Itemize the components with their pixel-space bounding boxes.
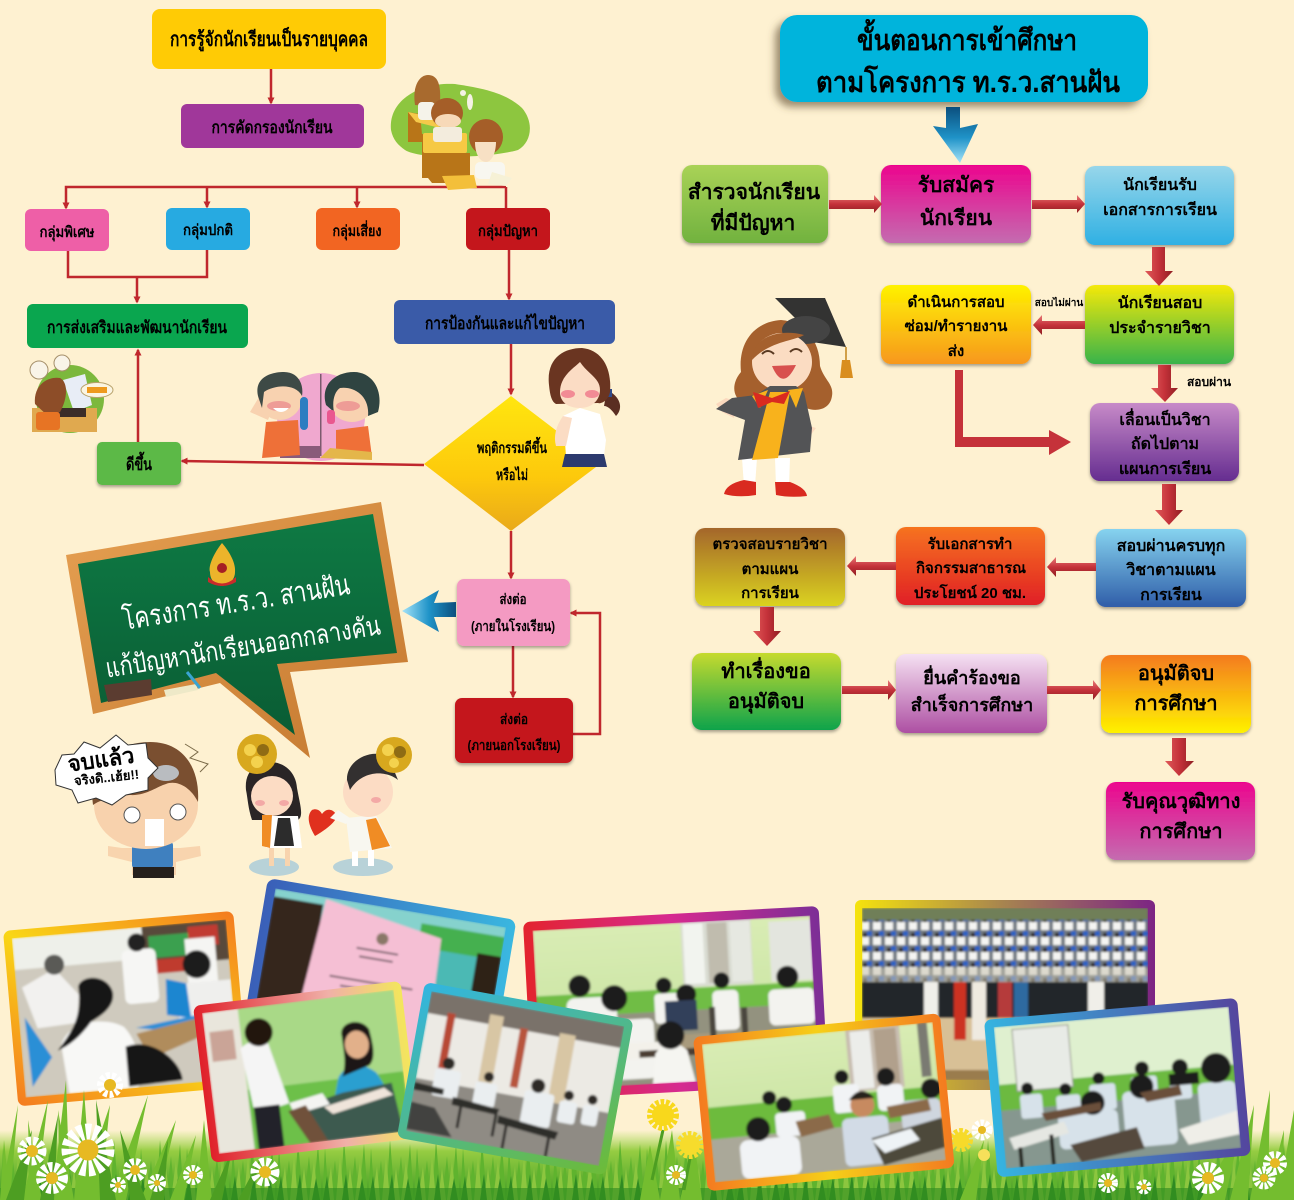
box: apply	[881, 165, 1031, 243]
box: graduation approved: การศึกษา	[1134, 693, 1218, 715]
box: student screening	[181, 104, 364, 148]
icon: graduating couple with crowns	[237, 734, 412, 876]
icon: girl at computer	[30, 355, 113, 433]
box: know students individually	[152, 9, 386, 69]
box: public service 20 hours: รับเอกสารทำ	[928, 536, 1012, 553]
box: at-risk group: กลุ่มเสี่ยง	[332, 220, 382, 241]
box: survey students: สำรวจนักเรียน	[688, 180, 821, 204]
box: receive study documents: เอกสารการเรียน	[1103, 200, 1217, 219]
heading: admission steps: ตามโครงการ ท.ร.ว.สานฝัน	[816, 64, 1120, 99]
box: normal group: กลุ่มปกติ	[183, 221, 233, 240]
box: next subject	[1090, 403, 1239, 481]
box: receive qualification	[1106, 782, 1255, 860]
icon: two kids on the phone	[250, 372, 380, 461]
board surface	[78, 514, 397, 735]
box: subject exam	[1085, 285, 1234, 364]
grass texture band	[0, 1130, 1294, 1200]
board title text: โครงการ ท.ร.ว. สานฝัน	[120, 567, 352, 637]
box: subject exam: ประจำรายวิชา	[1109, 319, 1211, 337]
box: problem group	[466, 208, 550, 250]
box: promote and develop students	[27, 304, 248, 348]
box: improved	[97, 442, 181, 485]
box: receive study documents	[1085, 166, 1234, 245]
box: normal group	[166, 208, 250, 250]
speech bubble: จริงดิ..เฮ้ย!!	[73, 767, 140, 788]
arrow: blue arrow to chalkboard	[402, 590, 456, 632]
box: subject exam: นักเรียนสอบ	[1118, 293, 1202, 312]
heart	[309, 809, 336, 836]
board subtitle text: แก้ปัญหานักเรียนออกกลางคัน	[103, 610, 383, 684]
box: check subjects: ตามแผน	[742, 561, 799, 578]
box: survey students	[682, 165, 828, 243]
box: request graduation approval: อนุมัติจบ	[728, 691, 804, 714]
diamond: behaviour improved?: หรือไม่	[496, 465, 528, 484]
photo: classroom student smiling	[693, 1013, 955, 1191]
photo: classroom exam rows	[984, 998, 1251, 1177]
box: passed all subjects	[1096, 529, 1246, 607]
box: refer within school: (ภายในโรงเรียน)	[471, 617, 555, 634]
box: receive qualification: รับคุณวุฒิทาง	[1122, 791, 1240, 814]
dandelions	[652, 1104, 990, 1190]
photo: whole-school group	[855, 900, 1155, 1090]
box: apply: นักเรียน	[920, 206, 993, 230]
box: know students individually: การรู้จักนักเรียนเป็นรายบุคคล	[170, 26, 368, 53]
right flowchart boxes	[682, 165, 1255, 860]
diamond: behaviour improved?: พฤติกรรมดีขึ้น	[477, 436, 548, 457]
box: submit graduation request: ยื่นคำร้องขอ	[923, 665, 1021, 688]
icon: shy schoolgirl	[549, 348, 620, 467]
box: resit: ดำเนินการสอบ	[907, 293, 1005, 311]
boy graduate	[330, 737, 412, 866]
label: failed: สอบไม่ผ่าน	[1035, 296, 1083, 309]
box: public service 20 hours	[896, 527, 1045, 605]
box: refer within school: ส่งต่อ	[500, 591, 526, 607]
box: refer outside school: (ภายนอกโรงเรียน)	[468, 736, 560, 753]
box: receive study documents: นักเรียนรับ	[1123, 175, 1197, 194]
box: next subject: เลื่อนเป็นวิชา	[1119, 408, 1211, 429]
icon: three students at desks	[391, 75, 530, 190]
box: resit: ส่ง	[948, 343, 964, 360]
icon: graduate girl	[716, 298, 853, 497]
box: request graduation approval	[692, 653, 841, 730]
photo: students writing exam at blue chairs	[3, 911, 248, 1106]
box: apply: รับสมัคร	[918, 174, 995, 197]
box: passed all subjects: สอบผ่านครบทุก	[1117, 538, 1225, 556]
box: check subjects: ตรวจสอบรายวิชา	[712, 535, 828, 553]
photo: classroom with windows	[523, 906, 828, 1100]
arrow: blue arrow down	[933, 107, 978, 163]
photo: open hall exam	[397, 982, 634, 1175]
box: receive qualification: การศึกษา	[1139, 821, 1223, 843]
box: public service 20 hours: ประโยชน์ 20 ชม.	[914, 583, 1026, 602]
box: submit graduation request: สำเร็จการศึกษา	[911, 693, 1033, 715]
box: resit: ซ่อม/ทำรายงาน	[905, 318, 1008, 335]
left flowchart connector lines	[66, 69, 600, 734]
box: passed all subjects: วิชาตามแผน	[1125, 561, 1216, 579]
board frame	[66, 502, 408, 758]
tall blades left	[0, 1080, 212, 1200]
box: special group	[25, 209, 109, 251]
diamond: behaviour improved?	[424, 396, 600, 531]
box: check subjects	[695, 528, 845, 606]
daisies	[22, 1076, 1283, 1192]
box: prevent and solve problems: การป้องกันและแก้ไขปัญหา	[425, 313, 585, 334]
box: prevent and solve problems	[394, 300, 615, 344]
box: refer outside school: ส่งต่อ	[500, 711, 528, 727]
heading: admission steps	[780, 15, 1148, 102]
icon: shocked boy with speech bubble	[55, 735, 208, 878]
box: graduation approved: อนุมัติจบ	[1138, 663, 1214, 686]
box: refer outside school	[455, 698, 573, 763]
box: improved: ดีขึ้น	[126, 451, 152, 474]
grass and flowers meadow	[0, 1076, 1294, 1200]
box: request graduation approval: ทำเรื่องขอ	[721, 656, 811, 683]
label: passed: สอบผ่าน	[1187, 375, 1232, 389]
speech bubble: จบแล้ว	[66, 743, 136, 777]
box: next subject: ถัดไปตาม	[1131, 434, 1199, 453]
school emblem	[208, 543, 236, 586]
box: public service 20 hours: กิจกรรมสาธารณ	[916, 559, 1026, 577]
photo: pink document cover	[233, 878, 516, 1127]
box: passed all subjects: การเรียน	[1140, 585, 1202, 604]
photo: student and teacher at desk	[193, 981, 419, 1163]
box: submit graduation request	[896, 654, 1047, 733]
box: at-risk group	[316, 208, 400, 250]
heading: admission steps: ขั้นตอนการเข้าศึกษา	[857, 18, 1077, 57]
box: next subject: แผนการเรียน	[1119, 459, 1211, 478]
chalkboard speech bubble	[66, 502, 408, 758]
speech bubble	[55, 735, 158, 805]
chalk tray items	[104, 672, 200, 702]
red 3D arrows between steps	[753, 195, 1194, 776]
box: check subjects: การเรียน	[741, 585, 800, 602]
tall blades right	[640, 1090, 1294, 1200]
box: refer within school	[457, 579, 570, 646]
box: resit	[881, 285, 1031, 364]
box: special group: กลุ่มพิเศษ	[40, 223, 95, 242]
arrow: resit to next subject	[955, 370, 1071, 455]
box: graduation approved	[1101, 655, 1251, 733]
box: promote and develop students: การส่งเสริมและพัฒนานักเรียน	[47, 317, 227, 337]
box: student screening: การคัดกรองนักเรียน	[212, 117, 333, 137]
box: problem group: กลุ่มปัญหา	[478, 223, 538, 241]
box: survey students: ที่มีปัญหา	[711, 207, 795, 236]
girl graduate	[237, 734, 302, 866]
